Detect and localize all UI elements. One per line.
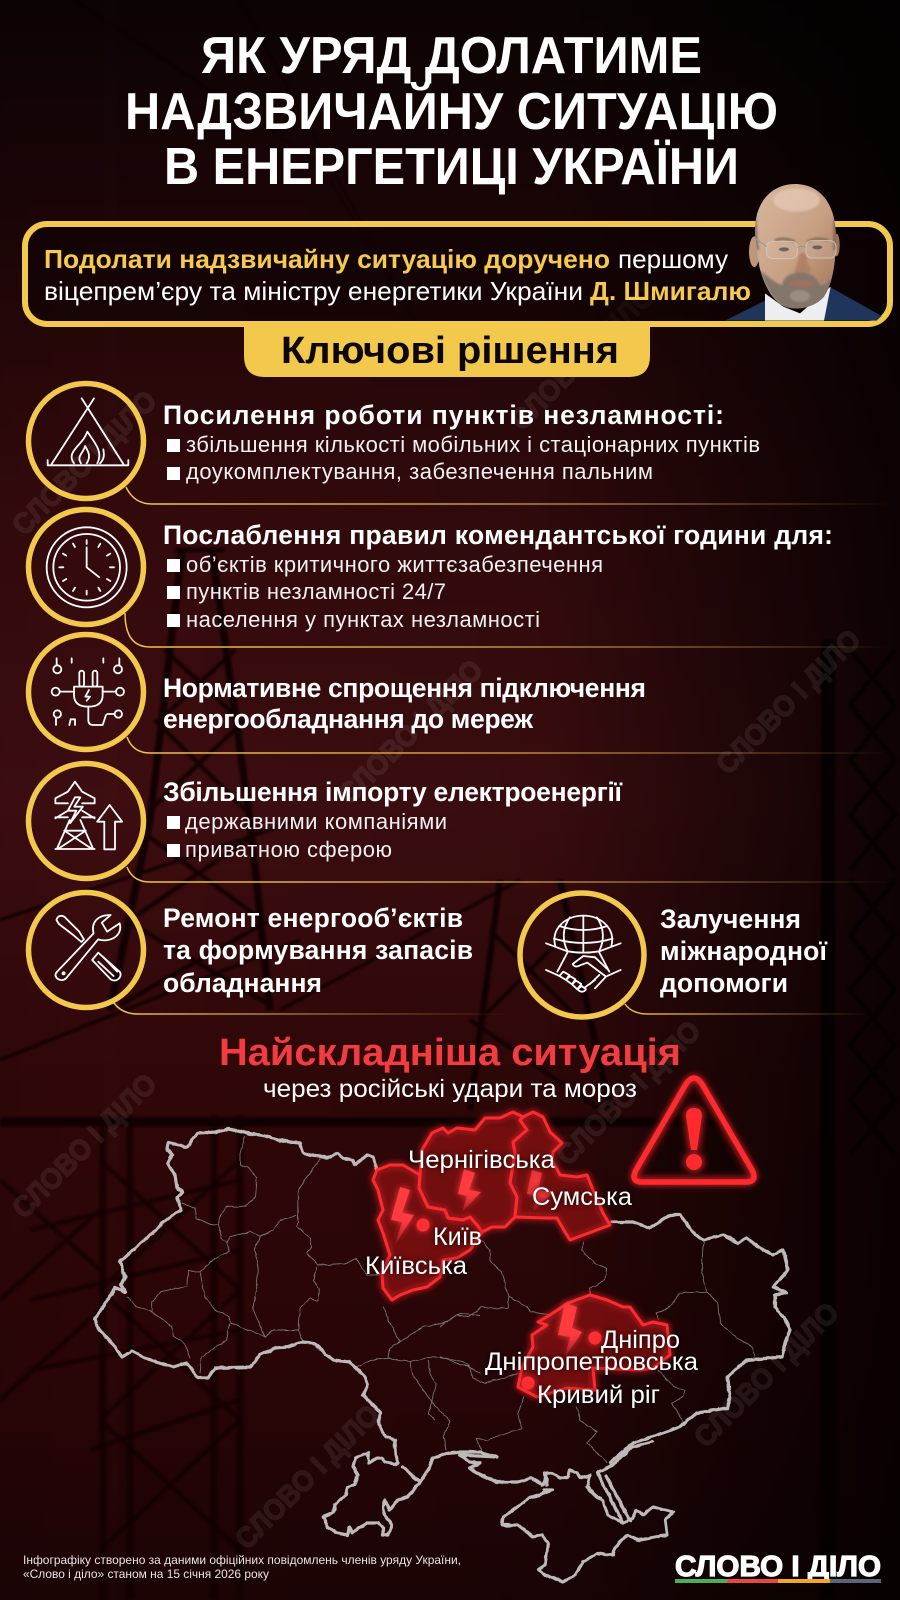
text [163, 520, 833, 632]
title: В ЕНЕРГЕТИЦІ УКРАЇНИ [164, 138, 739, 196]
title [125, 27, 778, 196]
icon: warning triangle [634, 1078, 754, 1182]
map labels [365, 1146, 698, 1409]
panel text: першому [618, 244, 728, 274]
panel text: Подолати надзвичайну ситуацію доручено [44, 244, 610, 274]
item: grid connection [28, 634, 890, 753]
map labels: Київ [433, 1223, 482, 1251]
text: енергообладнання до мереж [163, 704, 534, 734]
mid tower [470, 880, 610, 1110]
text: Послаблення правил комендантської години для: [163, 520, 833, 550]
oblast borders [127, 1137, 755, 1463]
map labels: Кривий ріг [537, 1381, 660, 1409]
icon: wrench and screwdriver [55, 915, 121, 981]
icon: pylon with arrow [55, 782, 122, 849]
item: curfew [28, 510, 890, 647]
watermarks: СЛОВО І ДІЛО [6, 1068, 163, 1225]
right tower [821, 640, 835, 1600]
source note: Інфографіку створено за даними офіційних повідомлень членів уряду України, [23, 1553, 461, 1567]
text: приватною сферою [185, 837, 392, 862]
highlighted regions [373, 1112, 670, 1397]
item: resilience points [28, 384, 890, 504]
item: electricity import [28, 764, 890, 882]
text [163, 673, 646, 734]
icon: globe and handshake [546, 916, 621, 992]
panel text: Д. Шмигалю [590, 276, 751, 306]
outer border [95, 1129, 790, 1582]
icon: clock [47, 527, 127, 607]
map labels: Чернігівська [408, 1146, 555, 1174]
map of Ukraine [95, 1112, 790, 1582]
logo: СЛОВО І ДІЛО [675, 1551, 881, 1583]
watermarks: СЛОВО І ДІЛО [6, 385, 163, 542]
watermarks: СЛОВО І ДІЛО [550, 1015, 707, 1172]
text: доукомплектування, забезпечення пальним [186, 459, 653, 484]
item: international aid [520, 893, 870, 1017]
watermarks: СЛОВО І ДІЛО [710, 624, 867, 781]
title: НАДЗВИЧАЙНУ СИТУАЦІЮ [125, 82, 778, 141]
panel text: віцепрем’єру та міністру енергетики України [44, 276, 583, 306]
city dots [416, 1218, 602, 1390]
watermarks: СЛОВО І ДІЛО [332, 654, 489, 811]
portrait [725, 184, 882, 321]
text [660, 904, 828, 998]
source note [23, 1553, 461, 1581]
text: пунктів незламності 24/7 [186, 579, 446, 604]
text: та формування запасів [163, 935, 473, 965]
left lower tower [103, 1115, 240, 1600]
heading: key decisions: Ключові рішення [281, 330, 619, 372]
text: міжнародної [660, 936, 828, 966]
text: державними компаніями [185, 809, 447, 834]
text: об’єктів критичного життєзабезпечення [186, 552, 603, 577]
map labels: Сумська [532, 1183, 632, 1211]
heading: hardest situation [219, 1032, 681, 1103]
text [163, 400, 760, 484]
watermarks [6, 280, 867, 1556]
text: Залучення [660, 904, 801, 934]
source note: «Слово і діло» станом на 15 січня 2026 року [23, 1567, 269, 1581]
text: Посилення роботи пунктів незламності: [163, 400, 724, 430]
icon: plug [52, 658, 124, 725]
map labels: Київська [365, 1252, 467, 1280]
text: обладнання [163, 968, 322, 998]
map labels: Дніпро [601, 1326, 680, 1354]
watermarks: СЛОВО І ДІЛО [688, 1297, 845, 1454]
title: ЯК УРЯД ДОЛАТИМЕ [201, 27, 702, 85]
heading: hardest situation: Найскладніша ситуація [219, 1032, 681, 1074]
icon: tent with fire [48, 398, 128, 465]
central tower [110, 550, 270, 1010]
lightning icons [391, 1169, 582, 1357]
text: Збільшення імпорту електроенергії [163, 777, 623, 807]
text [163, 777, 623, 862]
item: repair [28, 892, 510, 1014]
text: допомоги [660, 968, 788, 998]
text: Ремонт енергооб’єктів [163, 903, 463, 933]
panel: responsible official [25, 184, 890, 324]
overhead [75, 0, 420, 330]
panel text [44, 244, 751, 306]
text: населення у пунктах незламності [186, 607, 540, 632]
heading: hardest situation: через російські удари та мороз [263, 1075, 637, 1103]
watermarks: СЛОВО І ДІЛО [229, 1399, 386, 1556]
heading: key decisions [244, 327, 650, 377]
watermarks: СЛОВО І ДІЛО [504, 280, 661, 437]
map labels: Дніпропетровська [485, 1348, 698, 1376]
text [163, 903, 473, 998]
text: Нормативне спрощення підключення [163, 673, 646, 703]
text: збільшення кількості мобільних і стаціонарних пунктів [186, 432, 760, 457]
